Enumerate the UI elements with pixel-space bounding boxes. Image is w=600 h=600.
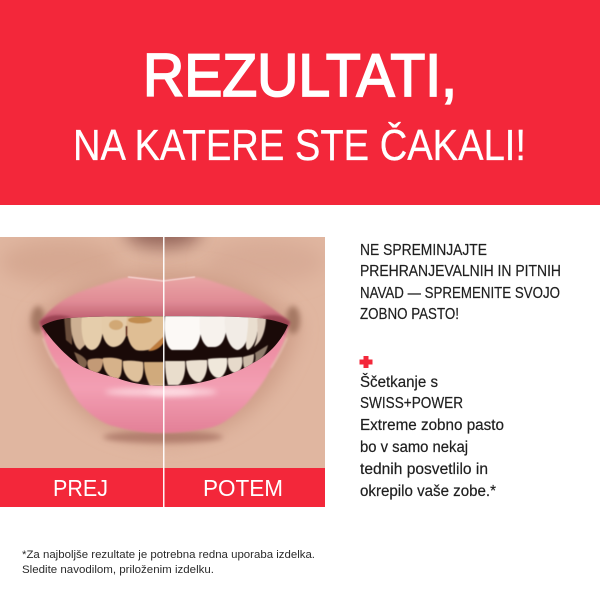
nose shadow and skin shading [118, 237, 208, 258]
upper teeth, after [164, 316, 201, 350]
text block: product claim: Ščetkanje s [360, 374, 438, 391]
text block: product claim: bo v samo nekaj [360, 439, 468, 456]
text block: product claim: tednih posvetlilo in [360, 461, 488, 478]
lower teeth, after [165, 361, 185, 385]
text block: call to action: NE SPREMINJAJTE [360, 242, 487, 259]
footnote: Sledite navodilom, priloženim izdelku. [22, 564, 214, 576]
text block: product claim: okrepilo vaše zobe.* [360, 483, 496, 500]
icon: red cross [360, 356, 372, 368]
title: REZULTATI, [143, 42, 457, 109]
text block: call to action: PREHRANJEVALNIH IN PITNIH [360, 263, 561, 280]
label band: before and after: PREJ [53, 475, 108, 501]
title [73, 42, 526, 170]
header banner [0, 0, 600, 205]
title: NA KATERE STE ČAKALI! [73, 120, 526, 170]
lip highlights [105, 388, 195, 396]
divider [163, 237, 164, 507]
lower teeth, before [74, 352, 87, 368]
footnote: *Za najboljše rezultate je potrebna redna uporaba izdelka. [22, 549, 315, 561]
text block: call to action: ZOBNO PASTO! [360, 306, 459, 323]
text block: product claim: SWISS+POWER [360, 395, 463, 412]
label band: before and after: POTEM [203, 475, 283, 501]
footnote [22, 549, 315, 576]
lower lip [41, 324, 289, 433]
before and after photo of mouth [0, 216, 325, 468]
label band: before and after [0, 468, 325, 507]
text block: product claim [360, 374, 504, 500]
text block: product claim: Extreme zobno pasto [360, 417, 504, 434]
mouth corner shading [40, 315, 72, 336]
upper teeth, before [64, 316, 72, 345]
text block: call to action: NAVAD — SPREMENITE SVOJO [360, 285, 560, 302]
mouth interior with teeth [42, 316, 288, 386]
upper lip [39, 277, 290, 330]
text block: call to action [360, 242, 561, 323]
